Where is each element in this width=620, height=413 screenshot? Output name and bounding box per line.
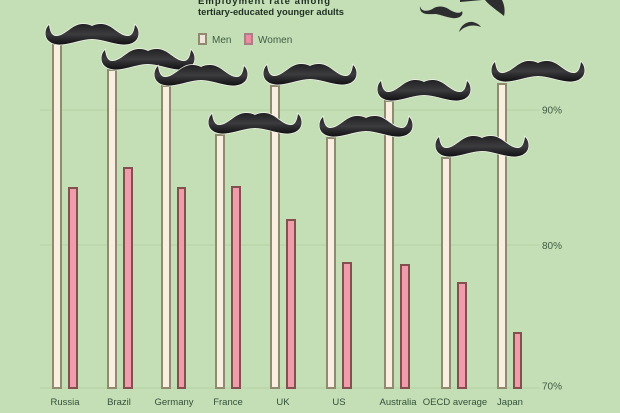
Brazil: Brazil — [107, 397, 131, 408]
Japan: Japan — [497, 397, 523, 408]
heading — [198, 0, 344, 18]
Japan — [491, 61, 585, 408]
UK: UK — [276, 397, 290, 408]
France — [208, 113, 302, 408]
legend: Men — [212, 35, 231, 46]
France: France — [213, 397, 243, 408]
Germany — [154, 65, 248, 408]
axis labels: 90% — [542, 106, 562, 116]
Australia — [377, 80, 471, 408]
legend — [199, 34, 292, 46]
US — [319, 116, 413, 408]
axis labels: 80% — [542, 241, 562, 252]
heading: tertiary-educated younger adults — [198, 7, 344, 18]
legend: Women — [258, 35, 292, 46]
Russia: Russia — [50, 397, 80, 408]
Russia — [45, 24, 139, 408]
OECD average: OECD average — [423, 397, 487, 408]
axis labels: 70% — [542, 382, 562, 392]
OECD average — [423, 136, 529, 408]
axis labels — [542, 106, 562, 392]
decorative small moustaches — [420, 0, 505, 32]
Brazil — [101, 49, 195, 408]
UK — [263, 64, 357, 408]
US: US — [332, 397, 346, 408]
Australia: Australia — [380, 397, 417, 408]
Germany: Germany — [154, 397, 194, 408]
